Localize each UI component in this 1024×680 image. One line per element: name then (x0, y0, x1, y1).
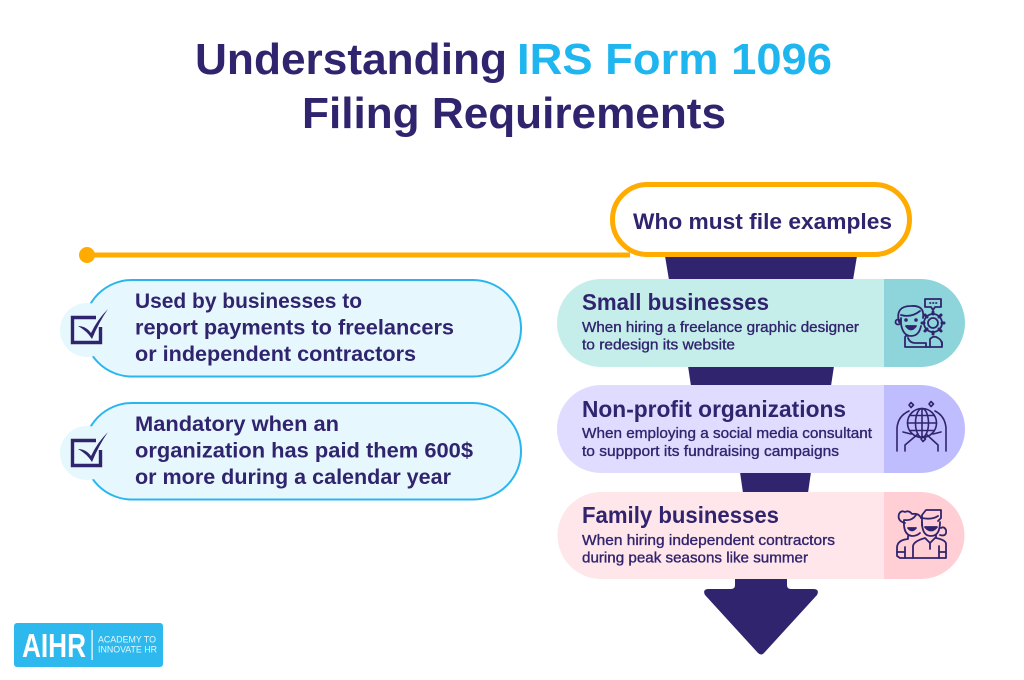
header pill: who must file examples: Who must file examples (633, 209, 892, 234)
connector line (79, 247, 630, 263)
panel: family businesses (558, 492, 964, 579)
text block (135, 290, 454, 366)
tagline: ACADEMY TO (98, 634, 156, 644)
header pill: who must file examples (612, 184, 910, 254)
panel: mandatory threshold (60, 403, 521, 500)
text block (582, 426, 872, 460)
tagline (98, 634, 157, 654)
funnel arrow (665, 256, 857, 654)
icon: hands holding globe (897, 402, 946, 451)
text block: to redesign its website (582, 338, 735, 354)
text block: Used by businesses to (135, 290, 362, 313)
heading: Non-profit organizations (582, 396, 846, 422)
title (195, 35, 832, 138)
heading: Small businesses (582, 289, 769, 315)
text block: Mandatory when an (135, 413, 339, 436)
text block: organization has paid them 600$ (135, 440, 473, 462)
panel: used by businesses (60, 280, 521, 376)
icon: checkbox (60, 426, 114, 480)
logo (14, 623, 163, 667)
icon: person with gear (896, 299, 944, 347)
text block: report payments to freelancers (135, 316, 454, 340)
tagline: INNOVATE HR (98, 644, 157, 654)
text block: during peak seasons like summer (582, 550, 808, 566)
text block: When employing a social media consultant (582, 426, 872, 442)
text block (582, 533, 835, 566)
text block: When hiring independent contractors (582, 533, 835, 549)
title: Filing Requirements (302, 89, 726, 138)
wordmark: AIHR (22, 627, 86, 664)
text block: or independent contractors (135, 343, 416, 366)
icon: two people smiling (897, 510, 946, 558)
text block (135, 413, 473, 489)
text block: When hiring a freelance graphic designer (582, 320, 859, 336)
title: Understanding (195, 35, 507, 84)
panel: non-profit organizations (557, 385, 965, 473)
text block (582, 320, 859, 354)
text block: to suppport its fundraising campaigns (582, 444, 839, 460)
icon: checkbox (60, 303, 114, 357)
title: IRS Form 1096 (517, 35, 832, 84)
panel: small businesses (557, 279, 965, 367)
heading: Family businesses (582, 502, 779, 528)
text block: or more during a calendar year (135, 466, 451, 489)
